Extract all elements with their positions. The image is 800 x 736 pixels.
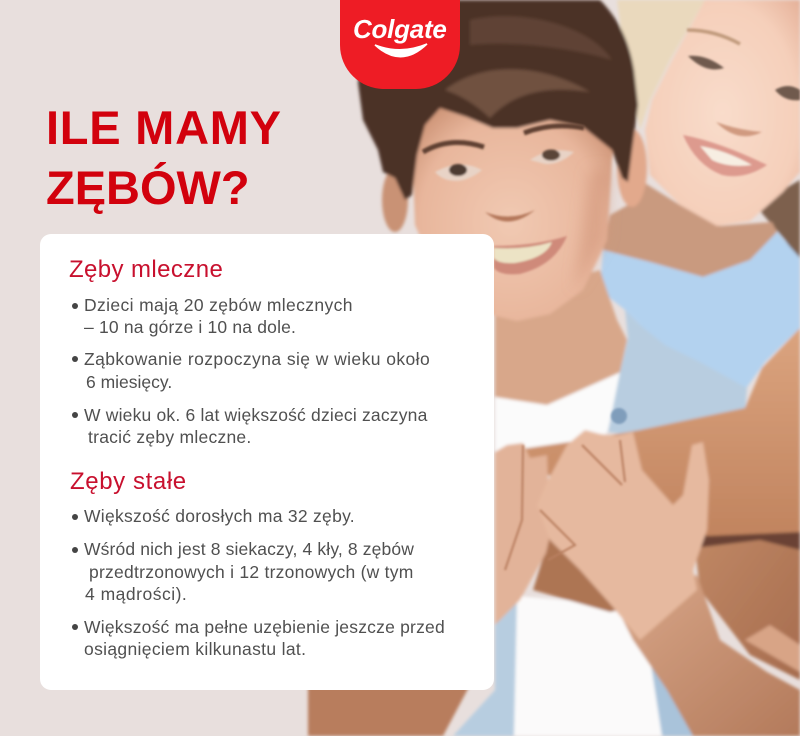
boy nose shadow [485, 210, 535, 222]
finger separations [505, 440, 625, 570]
boy ear left [382, 168, 408, 232]
girl left eye [688, 56, 724, 70]
boy forearm diagonal [613, 575, 800, 736]
lower denim right [648, 645, 695, 736]
vest button [611, 408, 627, 424]
girl nose shadow [716, 122, 762, 136]
list: permanent teeth: 4 mądrości). [85, 584, 187, 604]
left small hand [495, 443, 550, 625]
list: baby teeth: tracić zęby mleczne. [88, 427, 252, 447]
girl right eye [775, 86, 800, 100]
list: baby teeth: 6 miesięcy. [86, 372, 172, 392]
heading: baby teeth: Zęby mleczne [69, 256, 223, 283]
boy hair [358, 0, 638, 200]
girl shirt [600, 232, 800, 390]
logo smile [374, 43, 428, 58]
bottom left arm [308, 685, 470, 736]
boy face [410, 85, 620, 321]
girl face [645, 0, 800, 226]
list: baby teeth: Ząbkowanie rozpoczyna się w wieku około [84, 349, 430, 369]
title: ILE MAMY [46, 101, 282, 154]
girl upper arm [500, 328, 800, 536]
boy left iris [449, 164, 467, 176]
hair highlights [470, 16, 612, 60]
white t-shirt lower [514, 596, 665, 736]
denim vest [608, 310, 747, 436]
title [46, 101, 282, 214]
boy right eye [530, 150, 574, 164]
girl hair [617, 0, 705, 130]
boy brows [423, 126, 584, 152]
boy lips [494, 236, 567, 274]
girl teeth [700, 146, 752, 166]
boy right iris [542, 150, 560, 160]
white t-shirt upper [495, 372, 622, 455]
boy left eye [435, 164, 482, 181]
heading: permanent teeth: Zęby stałe [70, 468, 187, 495]
list: permanent teeth: osiągnięciem kilkunastu lat. [84, 639, 306, 659]
boy cheek shading [575, 170, 610, 290]
list: baby teeth [72, 295, 430, 447]
logo wordmark: Colgate [353, 14, 447, 44]
list: baby teeth: Dzieci mają 20 zębów mlecznych [84, 295, 353, 315]
list: permanent teeth: Wśród nich jest 8 siekaczy, 4 kły, 8 zębów [84, 539, 414, 559]
list: baby teeth: – 10 na górze i 10 na dole. [84, 317, 296, 337]
list: permanent teeth: Większość ma pełne uzębienie jeszcze przed [84, 617, 445, 637]
boy teeth [494, 242, 552, 263]
logo: Colgate badge [340, 0, 460, 89]
panel: information card [40, 234, 494, 690]
girl neck [603, 180, 777, 277]
boy ear right [617, 129, 647, 207]
boy hand [537, 430, 709, 640]
girl second arm [695, 540, 800, 680]
list: baby teeth: W wieku ok. 6 lat większość dzieci zaczyna [84, 405, 428, 425]
boy neck [495, 270, 627, 405]
girl brows [687, 30, 740, 44]
lower denim left [453, 600, 520, 736]
list: permanent teeth: Większość dorosłych ma 32 zęby. [84, 506, 355, 526]
list: permanent teeth: przedtrzonowych i 12 trzonowych (w tym [89, 562, 414, 582]
dark gap between arms [690, 525, 800, 560]
list: permanent teeth [72, 506, 445, 659]
girl lips [683, 135, 767, 176]
girl hand at right edge [745, 625, 800, 672]
title: ZĘBÓW? [46, 161, 250, 214]
girl hair at right edge [755, 180, 800, 262]
arm behind hands [533, 535, 620, 612]
